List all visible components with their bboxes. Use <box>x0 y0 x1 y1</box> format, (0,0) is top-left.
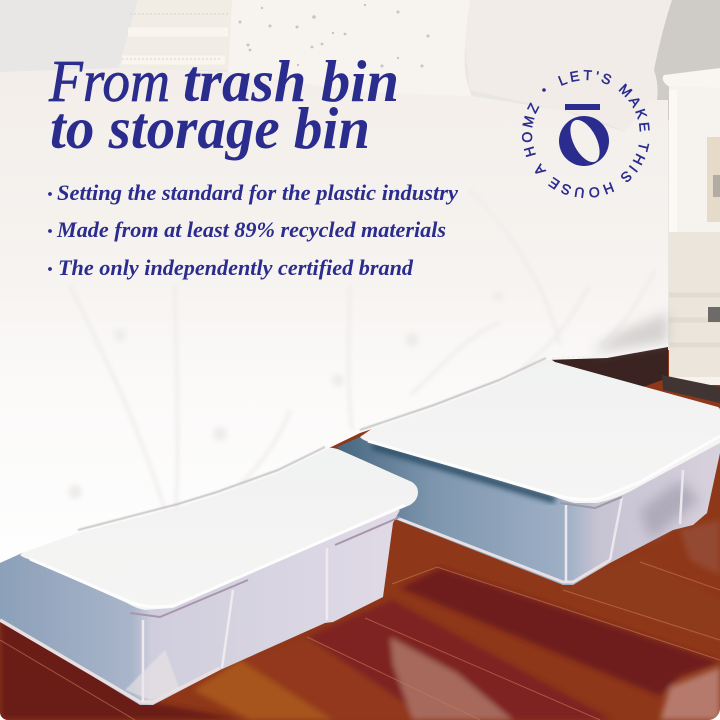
bullet list <box>48 180 458 280</box>
drawer handle <box>708 307 720 322</box>
picture <box>707 137 720 222</box>
logo badge <box>522 70 650 198</box>
bullet list: Setting the standard for the plastic industry <box>57 180 458 205</box>
title: trash bin <box>183 48 399 114</box>
nightstand <box>662 68 720 403</box>
metal base bar <box>662 375 720 403</box>
embroidery <box>68 291 503 499</box>
title: From <box>48 48 170 114</box>
circular slogan: LET'S MAKE THIS HOUSE A HOMZ <box>522 70 650 198</box>
letter o mark <box>559 115 609 167</box>
bed side shadow <box>590 312 668 354</box>
bullet list: Made from at least 89% recycled materials <box>56 217 446 242</box>
title: to storage bin <box>50 95 370 161</box>
bullet list: The only independently certified brand <box>58 255 414 280</box>
pillow: right <box>460 0 672 134</box>
comforter folds <box>70 190 655 510</box>
macron bar <box>565 104 600 110</box>
storage bin: right <box>337 345 720 585</box>
nightstand top <box>663 68 720 88</box>
bin lid <box>360 345 720 503</box>
bin body <box>0 510 400 705</box>
bed hem shadow <box>78 358 546 530</box>
headboard <box>650 0 720 120</box>
bed comforter <box>0 68 668 563</box>
pillow: eyelet <box>228 0 472 98</box>
title <box>48 48 399 161</box>
slogan dot <box>542 88 546 92</box>
wood floor <box>0 350 720 720</box>
bin lid <box>20 425 418 610</box>
bin body <box>337 430 720 585</box>
dark floor behind bed <box>540 340 668 388</box>
pillow: striped <box>118 0 240 70</box>
storage bin: left <box>0 425 418 705</box>
